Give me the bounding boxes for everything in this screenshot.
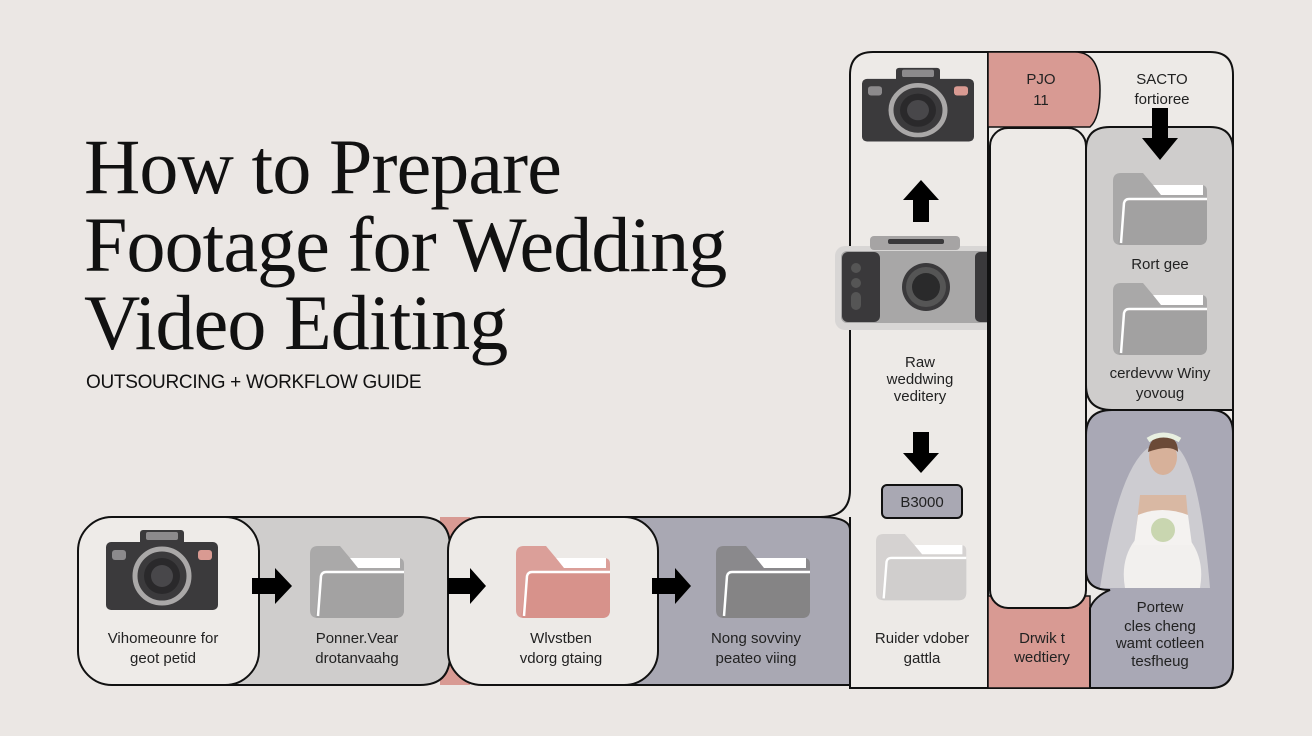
step 3: pink folder: Wlvstben — [530, 630, 592, 647]
text: step label — [875, 630, 969, 667]
text: step label: gattla — [904, 650, 941, 667]
step 3: pink folder: vdorg gtaing — [520, 650, 602, 667]
arrow down — [903, 432, 939, 473]
icon: folder — [876, 534, 966, 600]
subtitle: OUTSOURCING + WORKFLOW GUIDE — [86, 372, 421, 393]
arrow — [252, 568, 292, 604]
pink tab bottom: Drwik t — [1019, 630, 1066, 647]
badge — [882, 485, 962, 518]
header text: SACTO — [1136, 71, 1188, 88]
step 1: camera: geot petid — [130, 650, 196, 667]
step 4: folder: Nong sovviny — [711, 630, 802, 647]
text: raw wedding: Raw — [905, 354, 935, 371]
title: How to Prepare — [84, 123, 561, 210]
arrow — [652, 568, 691, 604]
step 1: camera — [106, 530, 218, 667]
text: raw wedding: veditery — [894, 388, 947, 405]
panel: right column — [988, 52, 1233, 688]
text: step label: Ruider vdober — [875, 630, 969, 647]
title: Footage for Wedding — [84, 201, 726, 288]
gray panel: yovoug — [1136, 385, 1184, 402]
panel: bottom flow row — [78, 517, 850, 685]
text: raw wedding: weddwing — [886, 371, 953, 388]
pink tab top — [988, 52, 1100, 127]
step 1: camera: Vihomeounre for — [108, 630, 218, 647]
pink tab top: PJO — [1026, 71, 1056, 88]
pink tab top: 11 — [1033, 92, 1049, 109]
bride panel: wamt cotleen — [1115, 635, 1204, 652]
title — [84, 123, 726, 366]
pink tab bottom — [988, 596, 1090, 688]
title: Video Editing — [84, 279, 507, 366]
icon: camera top — [862, 68, 974, 141]
bride panel — [1086, 410, 1233, 688]
step 4: folder: peateo viing — [716, 650, 796, 667]
bride panel: cles cheng — [1124, 618, 1196, 635]
bride panel: Portew — [1137, 599, 1184, 616]
step 2: folder: drotanvaahg — [315, 650, 399, 667]
header text: fortioree — [1134, 91, 1190, 108]
pink tab bottom: wedtiery — [1013, 649, 1070, 666]
panel: vertical middle column — [820, 52, 1001, 688]
gray panel — [1086, 108, 1233, 410]
step 4: folder — [711, 546, 810, 667]
bride panel: tesfheug — [1131, 653, 1189, 670]
arrow up — [903, 180, 939, 222]
image: bride — [1100, 435, 1210, 588]
header text — [1134, 71, 1190, 108]
icon: big camera — [835, 236, 1001, 330]
inner white panel — [990, 128, 1086, 608]
gray panel: cerdevvw Winy — [1110, 365, 1211, 382]
text: raw wedding — [886, 354, 953, 405]
gray panel: Rort gee — [1131, 256, 1189, 273]
badge: B3000 — [900, 494, 944, 511]
arrow — [448, 568, 486, 604]
step 2: folder — [310, 546, 404, 667]
step 2: folder: Ponner.Vear — [316, 630, 398, 647]
step 3: pink folder — [516, 546, 610, 667]
